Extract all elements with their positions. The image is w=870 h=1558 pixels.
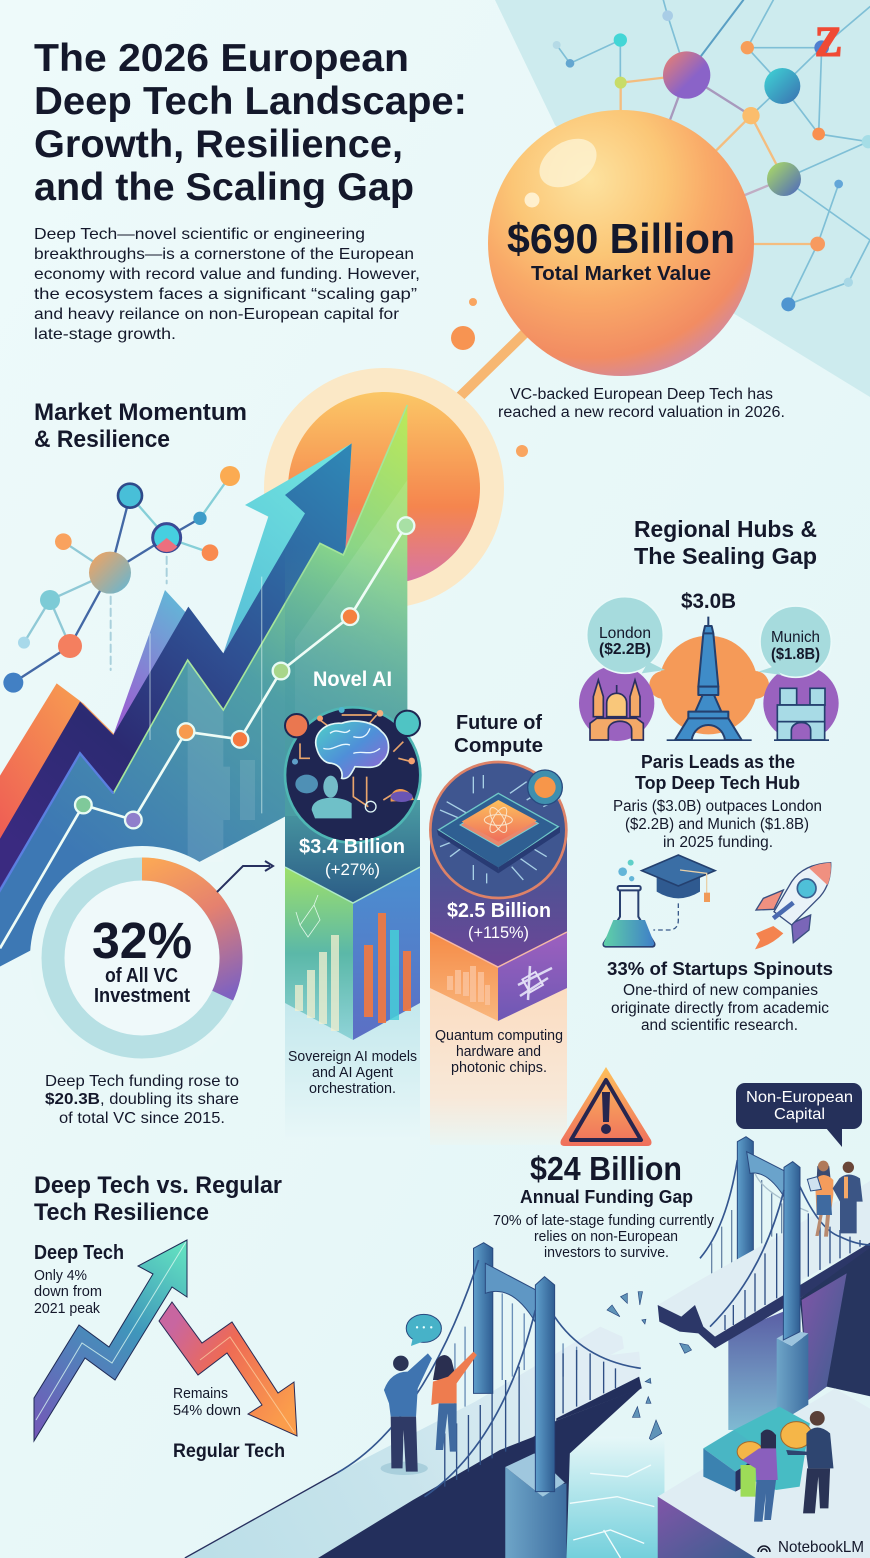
description: and AI Agent xyxy=(312,1065,393,1081)
growth chart xyxy=(0,405,414,967)
deep tech label: Deep Tech xyxy=(34,1242,124,1264)
funding gap text: 70% of late-stage funding currently xyxy=(493,1213,715,1229)
broken bridge scene xyxy=(185,1137,870,1558)
funding figure: $3.4 Billion xyxy=(299,836,405,858)
london label: London xyxy=(599,625,651,642)
right bridge xyxy=(658,1137,870,1430)
orange band xyxy=(0,683,115,847)
column body xyxy=(285,800,420,903)
heading: market momentum: Market Momentum xyxy=(34,399,247,426)
description: photonic chips. xyxy=(451,1060,547,1076)
paris value: $3.0B xyxy=(681,590,736,613)
description xyxy=(288,1049,417,1097)
valuation caption xyxy=(498,386,785,421)
donut value: 32% xyxy=(92,912,192,969)
left people xyxy=(381,1314,477,1475)
description: hardware and xyxy=(456,1044,541,1060)
spinouts text: and scientific research. xyxy=(641,1017,798,1034)
right deck xyxy=(658,1180,870,1337)
munich label xyxy=(771,629,820,663)
intro paragraph: the ecosystem faces a significant “scaling gap” xyxy=(34,286,417,303)
funding growth: (+27%) xyxy=(325,860,380,879)
regular tech note xyxy=(173,1385,241,1419)
green-blue mountain xyxy=(0,405,407,967)
funding summary text xyxy=(45,1073,239,1127)
column fade xyxy=(285,960,420,1140)
right land xyxy=(658,1388,870,1558)
left deck xyxy=(185,1327,641,1558)
column top blend xyxy=(285,547,407,817)
paris text: in 2025 funding. xyxy=(663,834,773,851)
right cables xyxy=(700,1160,870,1327)
callout: non-european capital: Capital xyxy=(774,1106,825,1123)
funding gap figure: $24 Billion xyxy=(530,1150,682,1187)
icon: quantum chip xyxy=(430,762,566,898)
water xyxy=(550,1437,664,1558)
funding gap label: Annual Funding Gap xyxy=(520,1186,693,1207)
navy arrow xyxy=(0,443,352,890)
deep tech note: 2021 peak xyxy=(34,1300,100,1317)
intro paragraph: Deep Tech—novel scientific or engineering xyxy=(34,226,365,243)
spinouts text: One-third of new companies xyxy=(623,982,818,999)
heading: regional hubs: Regional Hubs & xyxy=(634,516,817,542)
column fade xyxy=(430,985,567,1145)
funding gap text xyxy=(493,1213,715,1261)
regular tech label: Regular Tech xyxy=(173,1440,285,1462)
deep tech note xyxy=(34,1267,102,1317)
munich label: Munich xyxy=(771,629,820,646)
london bubble xyxy=(587,597,665,673)
paris text xyxy=(613,798,822,851)
right front pier xyxy=(777,1333,808,1430)
heading: Compute xyxy=(454,734,543,757)
description: orchestration. xyxy=(309,1081,396,1097)
regular tech note: 54% down xyxy=(173,1402,241,1419)
paris subheading xyxy=(635,751,800,793)
title xyxy=(34,37,467,209)
donut label xyxy=(94,965,190,1007)
shaded pillars xyxy=(188,480,407,862)
arrow: donut to column xyxy=(217,861,273,892)
person: woman with coins xyxy=(737,1430,778,1522)
left back tower xyxy=(474,1243,493,1393)
person: woman with tablet xyxy=(807,1161,833,1237)
intro paragraph: breakthroughs—is a cornerstone of the European xyxy=(34,246,414,263)
left ground xyxy=(318,1388,641,1558)
title: Deep Tech Landscape: xyxy=(34,80,467,123)
london label: ($2.2B) xyxy=(599,641,651,658)
novel ai label: Novel AI xyxy=(313,668,392,691)
person: man in suit xyxy=(833,1162,863,1233)
munich bubble xyxy=(758,606,831,677)
title: The 2026 European xyxy=(34,37,409,80)
description: Quantum computing xyxy=(435,1028,563,1044)
heading: market momentum: & Resilience xyxy=(34,426,170,453)
regular tech note: Remains xyxy=(173,1385,228,1402)
valuation caption: VC-backed European Deep Tech has xyxy=(510,386,773,403)
right cliff xyxy=(800,1242,870,1400)
intro paragraph xyxy=(34,226,420,343)
icon: flask xyxy=(603,860,655,947)
trend line xyxy=(0,517,414,948)
city hubs illustration xyxy=(579,597,839,741)
funding summary text: , doubling its share xyxy=(100,1091,239,1108)
right back tower xyxy=(737,1137,753,1267)
funding summary text: of total VC since 2015. xyxy=(59,1110,225,1127)
funding gap text: investors to survive. xyxy=(544,1245,669,1261)
sphere: total market value xyxy=(488,110,754,376)
donut chart: 32 percent xyxy=(30,846,254,1070)
funding summary text: Deep Tech funding rose to xyxy=(45,1073,239,1090)
icon: rocket xyxy=(755,863,831,949)
teal-purple band xyxy=(0,443,352,893)
left front hangers xyxy=(445,1350,615,1487)
heading: deep vs regular: Tech Resilience xyxy=(34,1199,209,1226)
heading: deep vs regular: Deep Tech vs. Regular xyxy=(34,1172,282,1199)
spinouts text: originate directly from academic xyxy=(611,1000,829,1017)
icon: brain network xyxy=(285,707,420,843)
title: and the Scaling Gap xyxy=(34,166,414,209)
light beams xyxy=(150,577,262,813)
sun behind chart xyxy=(264,368,504,608)
london hub xyxy=(579,666,654,741)
panel: future of compute column xyxy=(430,711,567,1145)
icon: graduation cap xyxy=(642,855,715,930)
callout: non-european capital: Non-European xyxy=(746,1089,853,1106)
left pier xyxy=(505,1467,566,1558)
right pier back xyxy=(728,1312,783,1430)
person: woman reaching xyxy=(431,1352,477,1452)
donut label: Investment xyxy=(94,985,190,1007)
cash boxes xyxy=(734,1407,810,1490)
heading: deep vs regular xyxy=(34,1172,282,1226)
person: man with coins xyxy=(781,1411,833,1513)
donut label: of All VC xyxy=(105,965,178,987)
right front hangers xyxy=(725,1213,860,1330)
isometric faces xyxy=(430,932,567,1021)
logo mark: Z xyxy=(815,20,842,66)
title: Growth, Resilience, xyxy=(34,123,403,166)
left deck edge xyxy=(556,1377,642,1421)
left front tower xyxy=(535,1277,555,1492)
column body xyxy=(430,830,567,967)
market value figure: $690 Billion xyxy=(507,215,735,262)
network graph top right xyxy=(553,0,870,311)
munich label: ($1.8B) xyxy=(771,646,820,663)
paris text: Paris ($3.0B) outpaces London xyxy=(613,798,822,815)
network nodes xyxy=(553,10,870,311)
right front tower xyxy=(783,1162,800,1340)
intro paragraph: economy with record value and funding. However, xyxy=(34,266,420,283)
description: Sovereign AI models xyxy=(288,1049,417,1065)
speech bubble xyxy=(406,1314,441,1346)
funding growth: (+115%) xyxy=(468,923,529,942)
heading: market momentum xyxy=(34,399,247,453)
spinout icons xyxy=(603,855,831,949)
paris subheading: Paris Leads as the xyxy=(641,751,795,772)
intro paragraph: and heavy reilance on non-European capital for xyxy=(34,306,400,323)
isometric faces xyxy=(285,867,420,1040)
london label xyxy=(599,625,651,658)
intro paragraph: late-stage growth. xyxy=(34,326,176,343)
valuation caption: reached a new record valuation in 2026. xyxy=(498,404,785,421)
funding summary text: $20.3B xyxy=(45,1091,100,1108)
connector stick xyxy=(440,332,526,416)
heading: regional hubs xyxy=(634,516,817,569)
market value label: Total Market Value xyxy=(531,263,711,285)
arrow: deep tech up xyxy=(34,1240,187,1441)
spinouts text xyxy=(611,982,829,1034)
paris subheading: Top Deep Tech Hub xyxy=(635,772,800,793)
molecule cluster xyxy=(3,466,240,693)
funding figure: $2.5 Billion xyxy=(447,900,551,922)
right people xyxy=(807,1161,863,1237)
arrow: regular tech down xyxy=(159,1302,297,1436)
description xyxy=(435,1028,563,1076)
heading: Future of xyxy=(456,711,542,734)
right back hangers xyxy=(712,1180,782,1273)
bridge debris xyxy=(607,1292,692,1440)
heading: regional hubs: The Sealing Gap xyxy=(634,543,817,569)
left bridge xyxy=(185,1243,870,1558)
callout: non-european capital xyxy=(736,1083,862,1147)
funding gap text: relies on non-European xyxy=(534,1229,678,1245)
left back hangers xyxy=(455,1293,577,1413)
heading xyxy=(454,711,543,757)
top-right tinted backdrop xyxy=(495,0,870,397)
deep tech note: Only 4% xyxy=(34,1267,87,1284)
sphere highlight xyxy=(524,129,605,208)
notebooklm watermark: NotebookLM xyxy=(778,1539,864,1556)
paris hub xyxy=(649,617,769,741)
icon: warning triangle xyxy=(560,1067,652,1146)
person: man pointing xyxy=(381,1314,441,1475)
left cables xyxy=(337,1260,641,1497)
munich hub xyxy=(763,666,839,741)
spinouts heading: 33% of Startups Spinouts xyxy=(607,958,833,979)
small orbs xyxy=(451,298,528,457)
panel: novel ai column xyxy=(285,668,420,1140)
deep tech note: down from xyxy=(34,1283,102,1300)
paris text: ($2.2B) and Munich ($1.8B) xyxy=(625,816,809,833)
